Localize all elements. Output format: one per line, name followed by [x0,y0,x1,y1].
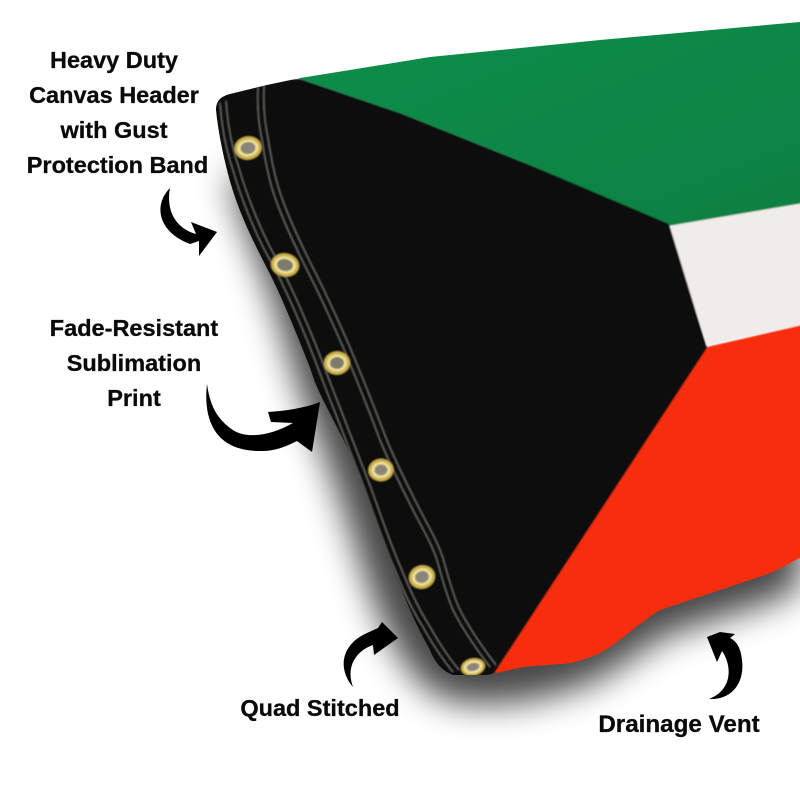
grommet 5 [408,564,436,590]
grommet 4 [368,458,394,482]
label: quad stitched: Quad Stitched [240,695,400,721]
green stripe [280,10,800,226]
label: fade-resistant print: Sublimation [67,350,201,376]
label: heavy duty canvas header: Protection Band [27,152,208,178]
grommet 6 [460,657,486,675]
label: heavy duty canvas header: Canvas Header [29,82,199,108]
label: heavy duty canvas header: Heavy Duty [50,47,178,73]
grommet 2 [269,251,301,279]
label: heavy duty canvas header: with Gust [59,117,168,143]
label: fade-resistant print [50,315,218,411]
flag [200,10,800,690]
arrow: to drainage vent [707,632,742,699]
label: drainage vent: Drainage Vent [598,711,760,738]
flag shadow [228,170,800,704]
arrow: to sublimation print [206,384,320,452]
arrow: to canvas header [160,188,217,256]
grommets [233,135,487,678]
label: fade-resistant print: Fade-Resistant [50,315,218,341]
label: fade-resistant print: Print [107,385,161,411]
grommet 1 [233,135,263,161]
stitched seams [220,86,496,672]
red stripe [490,323,800,680]
grommet 3 [323,350,351,376]
black hoist triangle [200,79,707,690]
label: heavy duty canvas header [27,47,208,178]
white stripe [668,202,800,345]
arrow: to quad stitching [344,622,398,687]
